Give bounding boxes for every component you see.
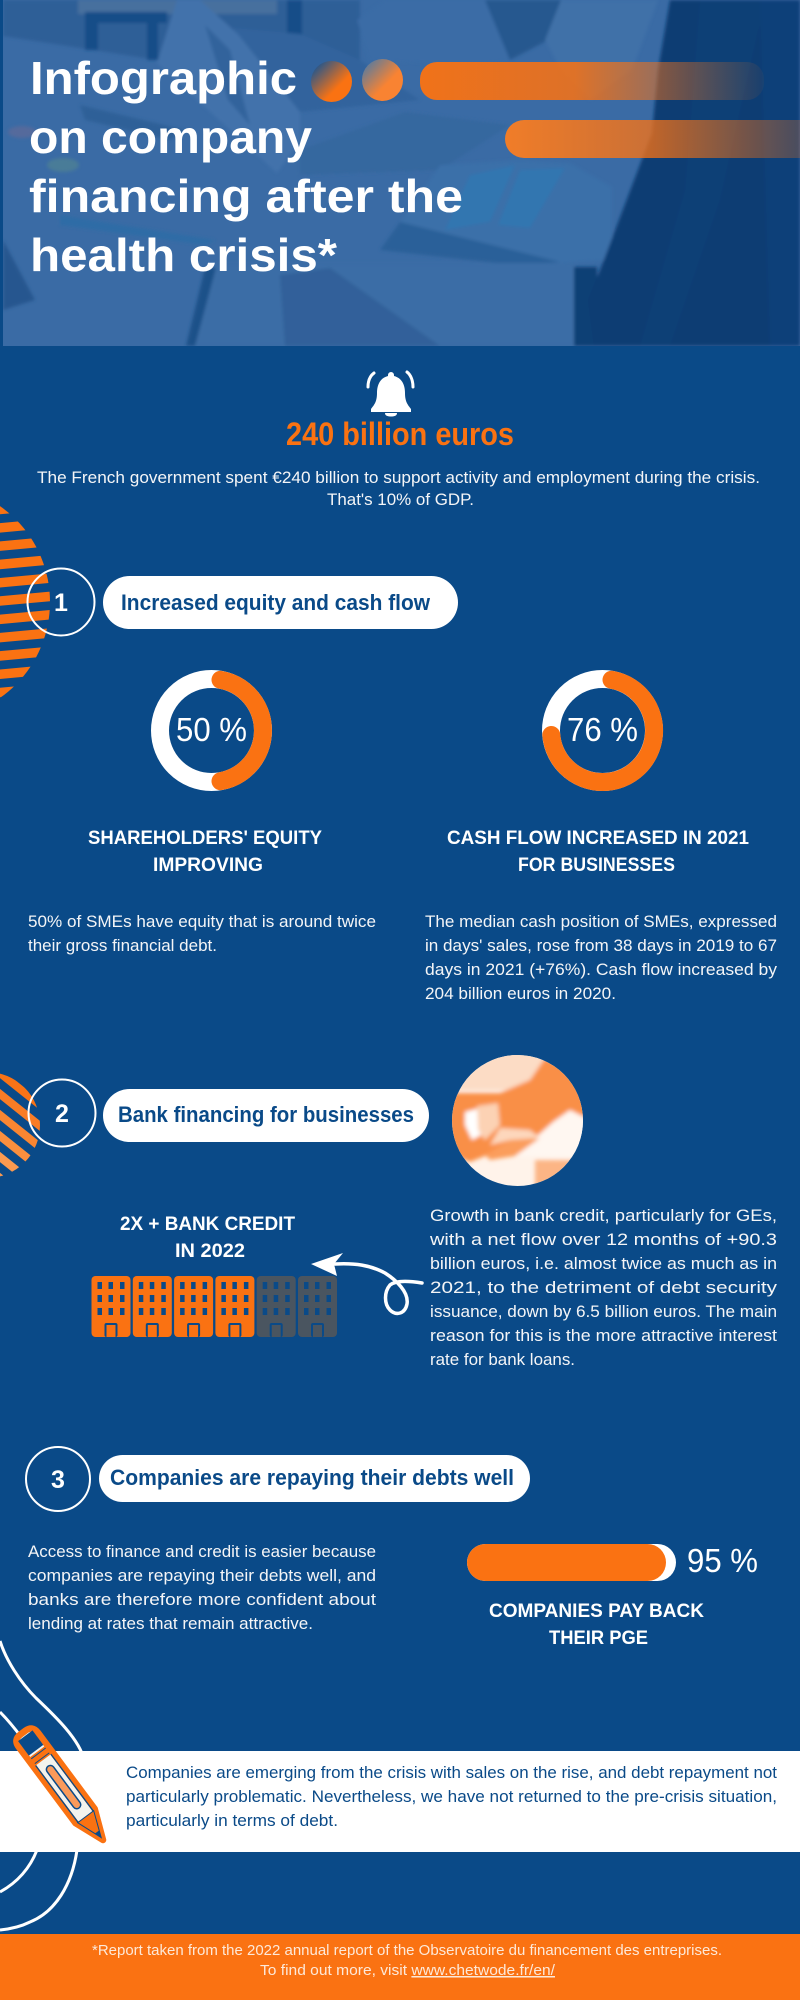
heading: bank credit xyxy=(120,1214,295,1262)
text: equity: 50% of SMEs have equity that is around twice xyxy=(28,913,376,931)
text: bank credit growth: with a net flow over 12 months of +90.3 xyxy=(429,1231,777,1249)
white conclusion band: particularly problematic. Nevertheless, we have not returned to the pre-crisis situation, xyxy=(126,1788,777,1806)
white conclusion band: particularly in terms of debt. xyxy=(126,1812,338,1830)
heading: companies pay back: COMPANIES PAY BACK xyxy=(489,1601,704,1622)
text: bank credit growth: rate for bank loans. xyxy=(430,1351,575,1369)
white conclusion band xyxy=(0,1751,800,1852)
text: bank credit growth: 2021, to the detriment of debt security xyxy=(430,1279,778,1297)
text: bank credit growth: issuance, down by 6.5 billion euros. The main xyxy=(430,1303,777,1321)
icon: bell xyxy=(368,372,413,416)
text: cash position: The median cash position of SMEs, expressed xyxy=(425,913,777,931)
section 1 heading xyxy=(103,576,458,629)
text: access to finance xyxy=(28,1543,376,1633)
text: cash position: 204 billion euros in 2020. xyxy=(425,985,616,1003)
text: cash position: days in 2021 (+76%). Cash flow increased by xyxy=(425,961,778,979)
title: Infographic xyxy=(30,52,297,104)
photo: handshake xyxy=(452,1055,583,1186)
arrow: curly pointing to buildings xyxy=(311,1253,422,1313)
text: access to finance: Access to finance and credit is easier because xyxy=(28,1543,376,1561)
icon: pencil xyxy=(13,1725,113,1847)
striped circle decoration 2 xyxy=(0,1074,40,1176)
title: health crisis* xyxy=(30,229,337,281)
heading: cash flow: CASH FLOW INCREASED IN 2021 xyxy=(447,828,749,849)
text: equity xyxy=(28,913,376,955)
heading: shareholders' equity xyxy=(88,828,322,876)
text: bank credit growth: reason for this is the more attractive interest xyxy=(430,1327,777,1345)
title xyxy=(29,52,463,281)
footer band: *Report taken from the 2022 annual report of the Observatoire du financement des entreprises. xyxy=(92,1942,722,1959)
section 2 heading: Bank financing for businesses xyxy=(118,1102,414,1127)
heading: shareholders' equity: SHAREHOLDERS' EQUITY xyxy=(88,828,322,849)
section 3 heading: Companies are repaying their debts well xyxy=(110,1465,514,1490)
heading: companies pay back: THEIR PGE xyxy=(549,1628,648,1649)
section 3 number xyxy=(26,1447,90,1511)
donut chart 50% xyxy=(160,679,263,782)
title: on company xyxy=(29,111,312,163)
text: access to finance: companies are repaying their debts well, and xyxy=(28,1567,376,1585)
intro text: That's 10% of GDP. xyxy=(327,491,474,509)
text: cash position xyxy=(425,913,778,1003)
donut chart 50%: 50 % xyxy=(176,711,247,748)
text: bank credit growth: billion euros, i.e. almost twice as much as in xyxy=(430,1255,777,1273)
text: bank credit growth xyxy=(429,1207,778,1369)
section 1 number: 1 xyxy=(54,589,68,617)
text: access to finance: lending at rates that remain attractive. xyxy=(28,1615,313,1633)
heading: shareholders' equity: IMPROVING xyxy=(153,855,263,876)
text: bank credit growth: Growth in bank credit, particularly for GEs, xyxy=(430,1207,777,1225)
heading: cash flow: FOR BUSINESSES xyxy=(518,855,675,876)
heading: bank credit: 2X + BANK CREDIT xyxy=(120,1214,295,1235)
section 2 number xyxy=(28,1080,96,1146)
section 2 number: 2 xyxy=(55,1100,69,1128)
white conclusion band: Companies are emerging from the crisis with sales on the rise, and debt repayment not xyxy=(126,1764,777,1782)
intro text xyxy=(37,469,760,509)
icon: row of buildings xyxy=(92,1276,337,1337)
striped circle decoration xyxy=(0,506,50,698)
heading: bank credit: IN 2022 xyxy=(175,1241,245,1262)
heading: cash flow xyxy=(447,828,749,876)
intro text: The French government spent €240 billion to support activity and employment during the crisis. xyxy=(37,469,760,487)
text: equity: their gross financial debt. xyxy=(28,937,217,955)
footer band xyxy=(0,1934,800,2000)
section 3 number: 3 xyxy=(51,1466,65,1494)
section 3 heading xyxy=(99,1455,530,1502)
donut chart 76%: 76 % xyxy=(567,711,638,748)
section 1 number xyxy=(28,568,94,636)
progress bar 95%: 95 % xyxy=(687,1542,758,1579)
text: access to finance: banks are therefore more confident about xyxy=(28,1591,376,1609)
title: financing after the xyxy=(29,170,463,222)
headline figure: 240 billion euros xyxy=(286,416,514,452)
donut chart 76% xyxy=(551,679,654,782)
progress bar 95% xyxy=(467,1542,758,1581)
text: cash position: in days' sales, rose from 38 days in 2019 to 67 xyxy=(425,937,777,955)
section 1 heading: Increased equity and cash flow xyxy=(121,590,431,615)
heading: companies pay back xyxy=(489,1601,704,1649)
decorative wavy lines xyxy=(0,1641,84,1930)
decorative bars in header xyxy=(420,62,800,158)
section 2 heading xyxy=(103,1089,429,1142)
decorative circles in header xyxy=(311,59,403,102)
header photo banner xyxy=(3,0,800,346)
footer band: To find out more, visit www.chetwode.fr/en/ xyxy=(260,1962,556,1979)
